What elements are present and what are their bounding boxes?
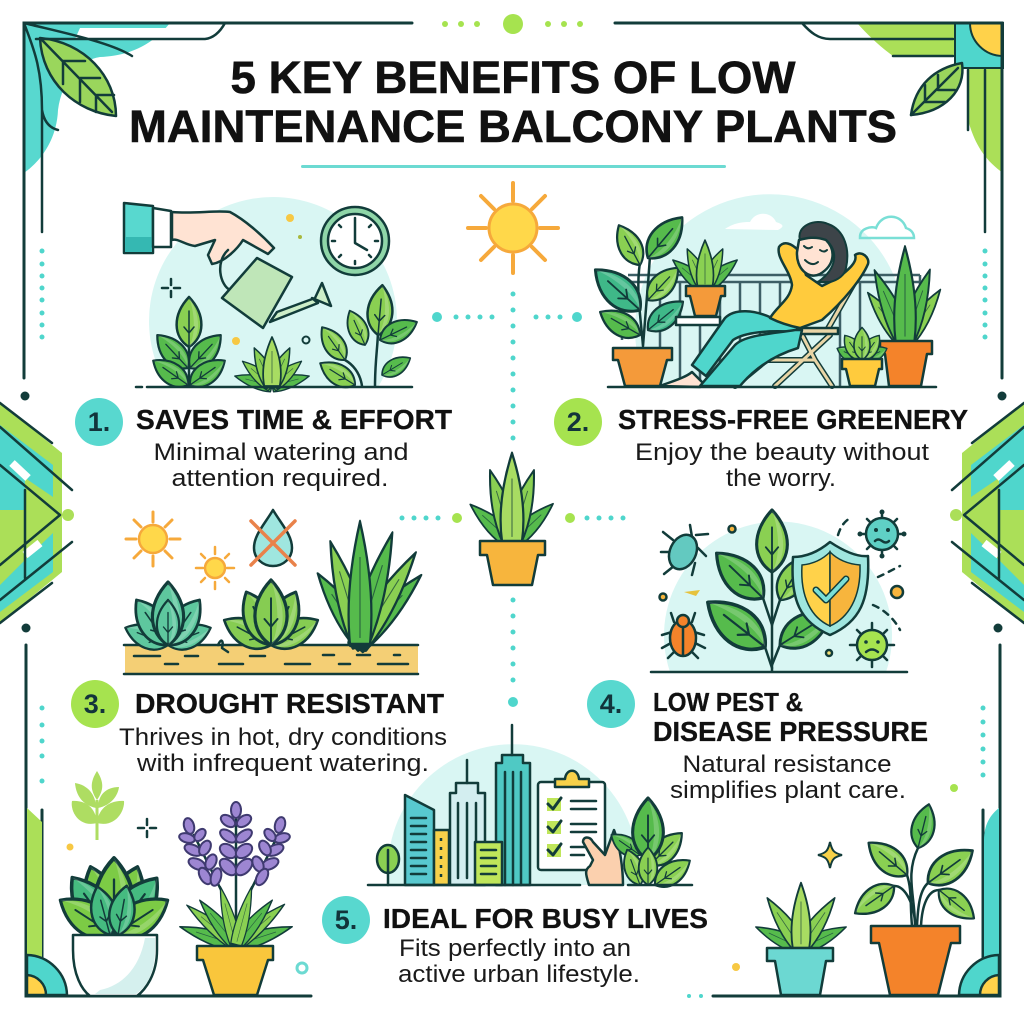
- side decoration: left chevrons: [0, 392, 74, 632]
- sparkle and dots: [162, 214, 310, 345]
- connector dots: [40, 248, 988, 998]
- floating sprout: [72, 771, 124, 840]
- clipboard: [538, 771, 605, 870]
- badge 1: 1.: [88, 407, 110, 437]
- woman: [660, 222, 868, 387]
- badge 3: 3.: [84, 689, 106, 719]
- small plant on ledge: [668, 240, 742, 325]
- text 2: [635, 439, 929, 492]
- badge 4: 4.: [600, 689, 622, 719]
- badge 5: [322, 896, 370, 944]
- text 1: [154, 439, 408, 492]
- heading 4: [653, 687, 928, 747]
- text 1: attention required.: [172, 465, 388, 492]
- hand: [124, 203, 274, 264]
- balcony railing: [622, 275, 920, 387]
- virus top: [858, 510, 906, 558]
- top ornament dots: [442, 14, 583, 34]
- potted succulent bottom left: [52, 858, 176, 996]
- text 4: simplifies plant care.: [670, 777, 906, 804]
- heading 5: IDEAL FOR BUSY LIVES: [383, 903, 708, 934]
- center aloe plant: [464, 453, 559, 585]
- chair: [735, 285, 853, 386]
- beetle orange: [662, 613, 705, 658]
- text 5: Fits perfectly into an: [399, 935, 631, 962]
- hand holding clipboard: [583, 830, 623, 885]
- left plant: [585, 209, 692, 386]
- corner decoration: top left: [24, 23, 225, 232]
- potted lavender: [178, 802, 294, 995]
- icon: sun: [468, 183, 558, 273]
- text 2: Enjoy the beauty without: [635, 439, 929, 466]
- fern: [606, 798, 696, 894]
- potted plant large bottom right: [848, 802, 981, 995]
- sparkle: [138, 819, 156, 837]
- virus bottom: [850, 623, 894, 667]
- yellow building: [434, 830, 449, 885]
- text 3: with infrequent watering.: [136, 750, 429, 777]
- corner decoration: bottom left: [27, 808, 67, 995]
- yellow dot right: [732, 963, 740, 971]
- yellow dot: [66, 844, 74, 850]
- dashed trails: [838, 517, 900, 630]
- illustration: drought resistant plants: [121, 510, 429, 674]
- beetle teal: [661, 525, 708, 575]
- heading 4: DISEASE PRESSURE: [653, 716, 928, 747]
- text 3: Thrives in hot, dry conditions: [119, 724, 447, 751]
- succulent 1: [121, 582, 215, 656]
- illustration: shield and pests: [651, 510, 907, 672]
- corner decoration: bottom right: [959, 808, 999, 995]
- watering can: [220, 250, 331, 328]
- left building: [405, 795, 434, 885]
- heading 3: DROUGHT RESISTANT: [135, 688, 444, 719]
- title: [129, 52, 897, 152]
- teal tower: [496, 725, 530, 885]
- text 3: [119, 724, 447, 777]
- clouds: [725, 214, 914, 238]
- corner decoration: top right: [802, 22, 1004, 234]
- text 5: [398, 935, 640, 988]
- illustration: city and checklist: [368, 725, 696, 894]
- aloe: [308, 522, 429, 653]
- sun large: [126, 512, 180, 566]
- ring dot: [297, 963, 307, 973]
- text 2: the worry.: [726, 465, 836, 492]
- title underline: [301, 165, 726, 168]
- text 1: Minimal watering and: [154, 439, 408, 466]
- badge 2: 2.: [567, 407, 589, 437]
- text 4: Natural resistance: [682, 751, 892, 778]
- sparkle right: [818, 842, 842, 868]
- illustration: relaxing on balcony: [585, 194, 948, 387]
- shield: [792, 542, 868, 635]
- title: MAINTENANCE BALCONY PLANTS: [129, 101, 897, 152]
- clock: [321, 207, 389, 275]
- sun small: [196, 547, 234, 589]
- heading 1: SAVES TIME & EFFORT: [136, 404, 452, 435]
- title: 5 KEY BENEFITS OF LOW: [230, 52, 796, 103]
- heading 2: STRESS-FREE GREENERY: [618, 404, 968, 435]
- right plants: [834, 247, 948, 386]
- badge 3: [71, 680, 119, 728]
- potted plant small bottom right: [753, 883, 849, 995]
- badge 2: [554, 398, 602, 446]
- ground: [125, 645, 418, 674]
- badge 4: [587, 680, 635, 728]
- gray building: [450, 760, 485, 885]
- green building: [475, 842, 502, 885]
- text 4: [670, 751, 906, 804]
- crossed drop: [251, 510, 295, 566]
- side decoration: right chevrons: [950, 392, 1024, 632]
- plants: [147, 284, 421, 394]
- tree: [377, 845, 399, 885]
- badge 5: 5.: [335, 905, 357, 935]
- succulent 2: [218, 580, 324, 657]
- heading 4: LOW PEST &: [653, 687, 803, 717]
- small germs: [660, 526, 903, 656]
- green ring dot: [950, 784, 958, 792]
- text 5: active urban lifestyle.: [398, 961, 640, 988]
- badge 1: [75, 398, 123, 446]
- illustration: watering can and plants: [124, 197, 421, 394]
